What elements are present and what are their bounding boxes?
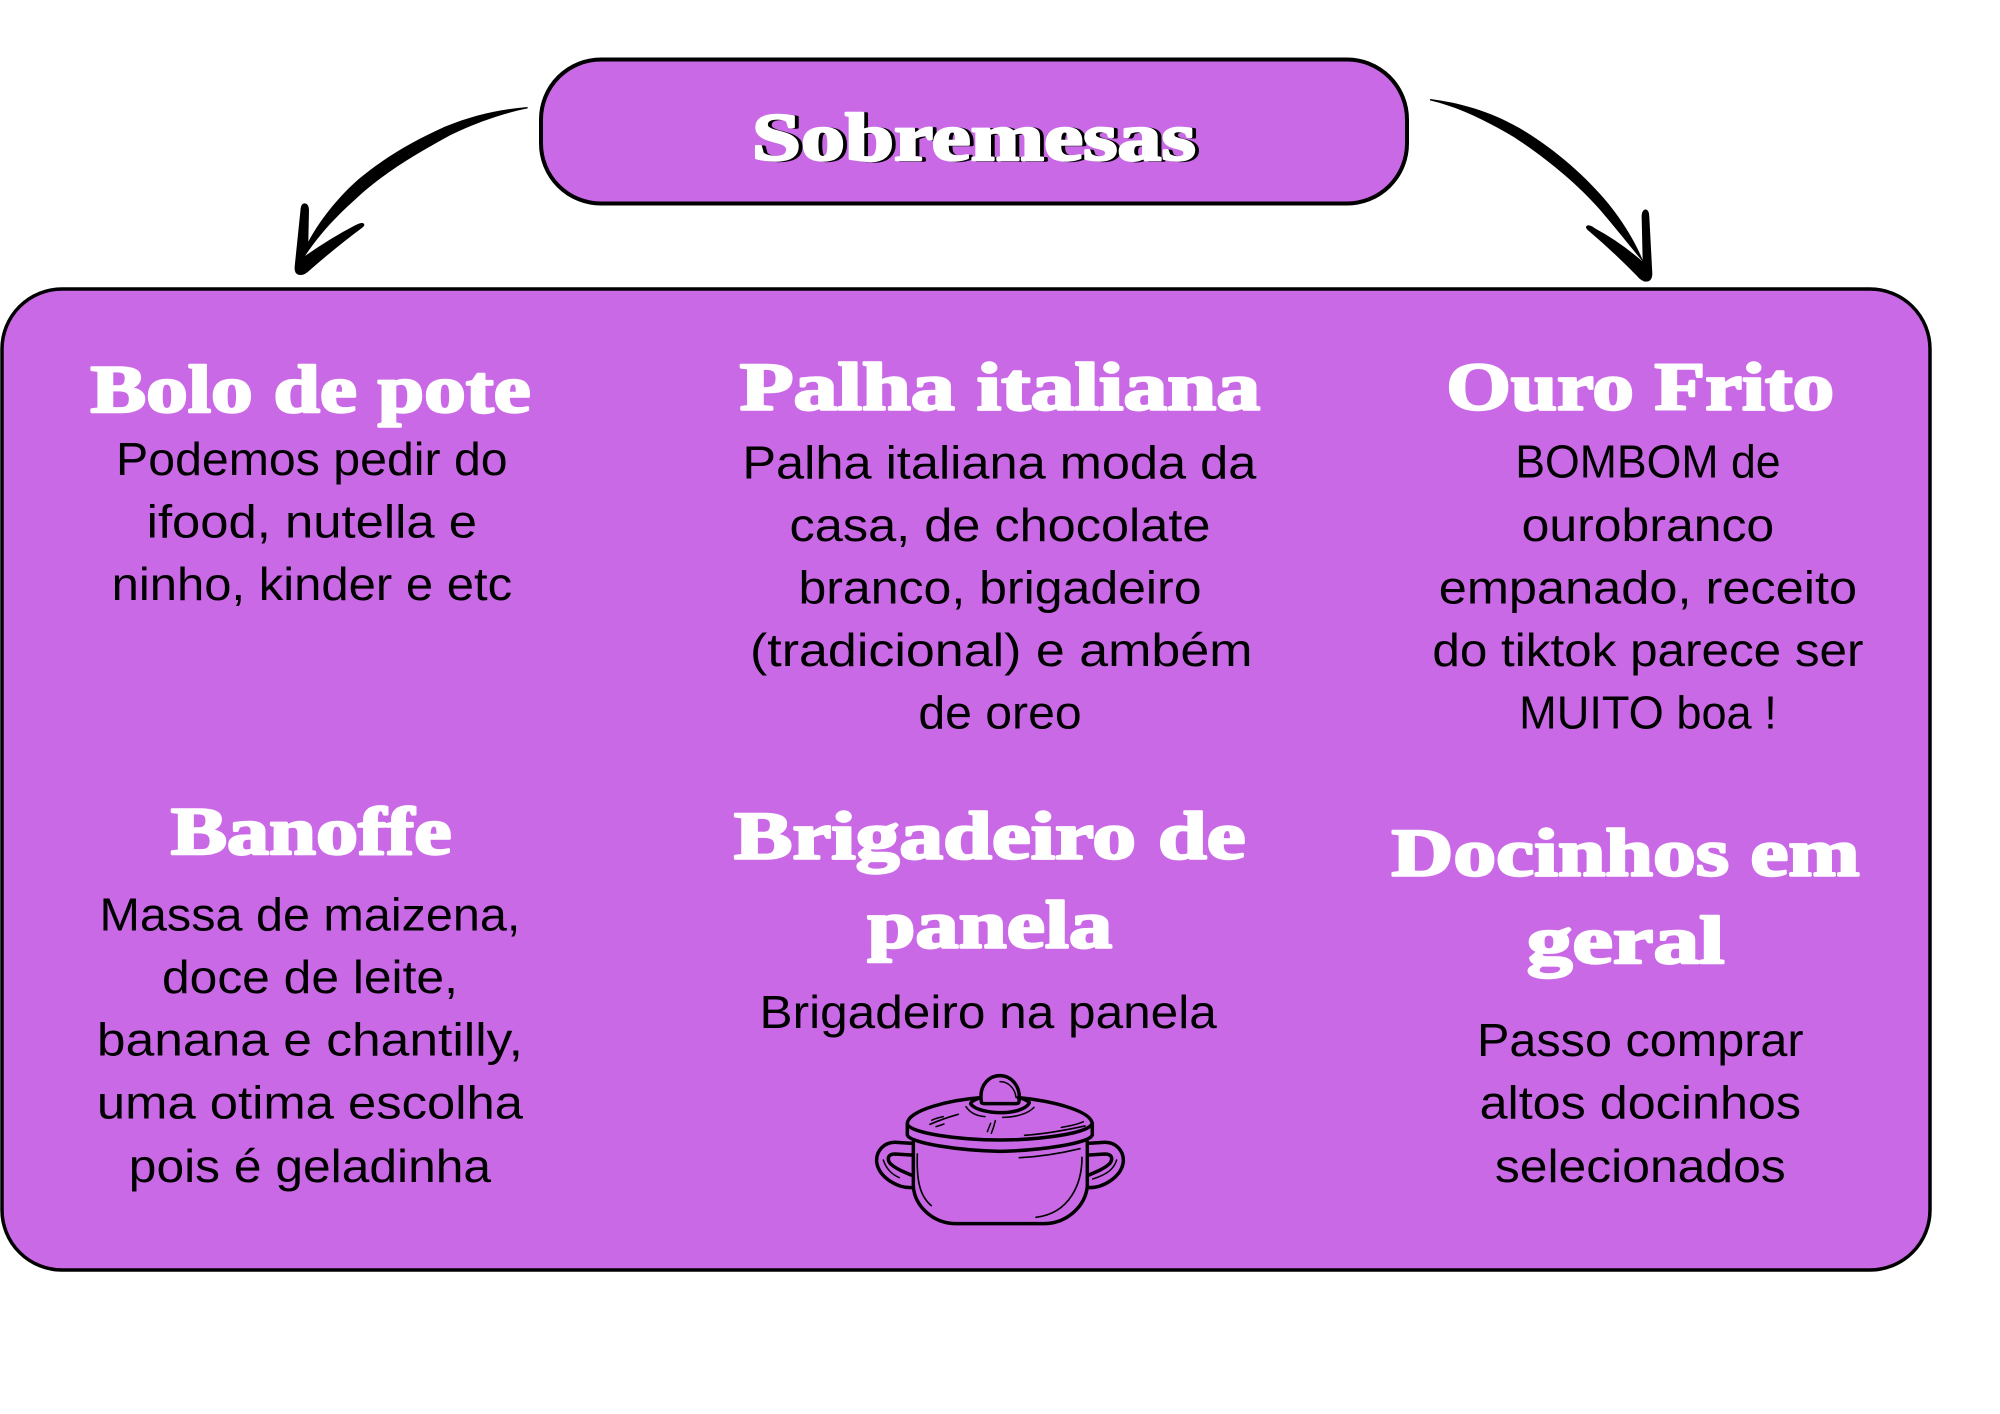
arrow: pill to right — [1430, 99, 1652, 282]
card: Palha italiana — [740, 349, 1260, 738]
text: Banoffe description: banana e chantilly, — [97, 1013, 523, 1065]
text: Bolo de pote description: ifood, nutella e — [147, 496, 477, 548]
text: Palha italiana description: casa, de chocolate — [790, 499, 1210, 551]
text: Docinhos description — [1477, 1014, 1804, 1192]
title pill — [541, 60, 1407, 204]
title: Sobremesas: Sobremesas — [752, 100, 1196, 175]
text: Docinhos description: selecionados — [1495, 1140, 1786, 1192]
text: Banoffe description: uma otima escolha — [97, 1077, 523, 1129]
icon: cooking pot — [877, 1076, 1123, 1224]
text: Docinhos description: altos docinhos — [1480, 1077, 1801, 1129]
pill background — [541, 60, 1407, 204]
card: Brigadeiro de panela — [734, 798, 1246, 1224]
card: Docinhos em geral — [1392, 816, 1860, 1192]
text: Banoffe description: Massa de maizena, — [99, 888, 520, 940]
text: Brigadeiro description: Brigadeiro na panela — [760, 986, 1217, 1038]
text: Bolo de pote description — [112, 433, 512, 610]
heading: Brigadeiro de panela — [734, 798, 1246, 963]
text: Docinhos description: Passo comprar — [1477, 1014, 1804, 1066]
text: Palha italiana description: branco, brigadeiro — [798, 561, 1202, 613]
title: Sobremesas: Sobremesas — [756, 101, 1200, 176]
heading: Brigadeiro de panela: panela — [867, 888, 1112, 963]
heading: Docinhos em geral — [1392, 816, 1860, 978]
heading: Brigadeiro de panela: Brigadeiro de — [734, 798, 1246, 873]
text: Ouro Frito description: ourobranco — [1522, 499, 1774, 551]
card: Ouro Frito — [1432, 349, 1864, 738]
heading: Palha italiana: Palha italiana — [740, 349, 1260, 424]
heading: Banoffe: Banoffe — [171, 794, 452, 869]
heading: Docinhos em geral: Docinhos em — [1392, 816, 1860, 891]
text: Palha italiana description: de oreo — [918, 686, 1082, 738]
text: Banoffe description — [97, 888, 523, 1192]
text: Ouro Frito description: empanado, receito — [1439, 561, 1857, 613]
text: Banoffe description: doce de leite, — [162, 951, 458, 1003]
panel: dessert options — [2, 289, 1930, 1270]
text: Bolo de pote description: ninho, kinder e etc — [112, 558, 512, 610]
text: Ouro Frito description — [1432, 436, 1864, 738]
text: Palha italiana description — [742, 436, 1256, 738]
heading: Bolo de pote: Bolo de pote — [91, 352, 531, 427]
text: Banoffe description: pois é geladinha — [129, 1140, 491, 1192]
text: Ouro Frito description: BOMBOM de — [1515, 436, 1781, 488]
arrow: pill to left — [295, 107, 528, 275]
heading: Docinhos em geral: geral — [1527, 903, 1724, 978]
text: Ouro Frito description: MUITO boa ! — [1519, 686, 1777, 738]
card: Bolo de pote — [91, 352, 531, 610]
text: Palha italiana description: Palha italiana moda da — [742, 436, 1256, 488]
heading: Ouro Frito: Ouro Frito — [1446, 349, 1834, 424]
panel background — [2, 289, 1930, 1270]
text: Ouro Frito description: do tiktok parece ser — [1432, 624, 1864, 676]
text: Bolo de pote description: Podemos pedir do — [116, 433, 508, 485]
text: Palha italiana description: (tradicional) e ambém — [750, 624, 1253, 676]
card: Banoffe — [97, 794, 523, 1192]
